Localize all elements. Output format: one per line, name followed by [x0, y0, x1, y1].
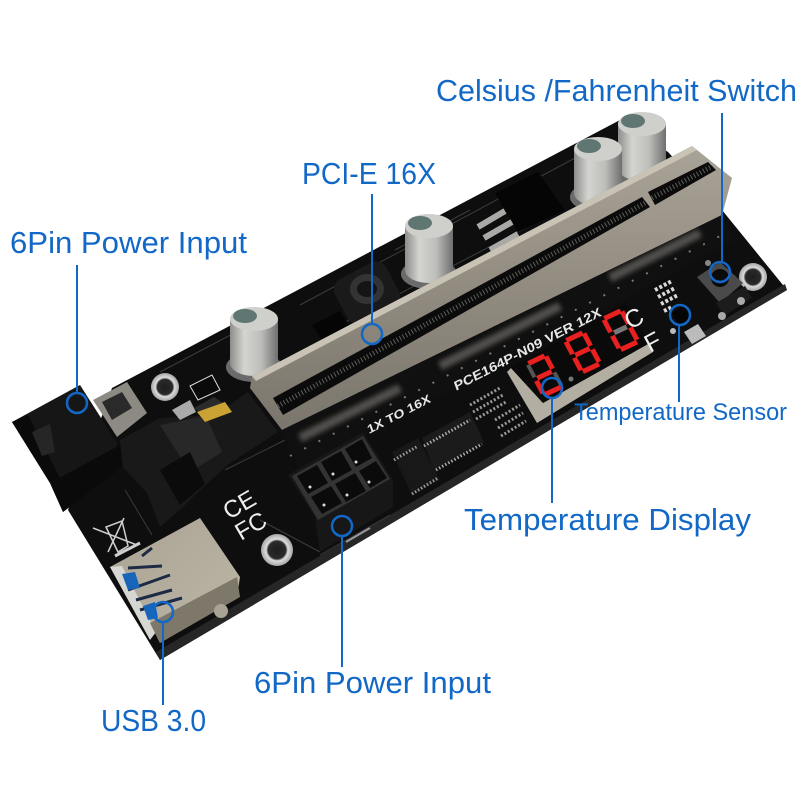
C and F unit marks: F [640, 326, 666, 358]
callout: left 6Pin Power Input: 6Pin Power Input [10, 225, 247, 260]
callout: Temperature Display [464, 378, 751, 537]
inductor coil [330, 257, 404, 329]
callout: bottom 6Pin Power Input: 6Pin Power Input [254, 665, 491, 700]
sensor and resistors [655, 281, 706, 344]
C and F unit marks [620, 302, 666, 358]
digit 0 [603, 310, 638, 350]
celsius fahrenheit push switch [697, 260, 752, 320]
callout: Temperature Display: Temperature Display [464, 502, 751, 537]
circuit board [68, 120, 787, 660]
7-segment temperature display [507, 303, 653, 423]
callout: USB 3.0 [101, 602, 206, 738]
decimal point [568, 376, 574, 382]
callout: bottom 6Pin Power Input [254, 516, 491, 700]
small SMD parts [172, 375, 232, 422]
left 6-pin power connector [12, 385, 278, 527]
6-pin power input connector [288, 432, 393, 552]
callout: PCI-E 16X [302, 156, 436, 344]
USB 3.0 port [110, 518, 240, 643]
capacitors [226, 112, 670, 382]
recycling bin icon [93, 518, 140, 556]
CE and FCC marks: FC [230, 507, 272, 546]
mounting holes [151, 263, 767, 566]
callout: Celsius Fahrenheit Switch [436, 73, 797, 282]
board silkscreen text: 1X TO 16X [365, 391, 432, 437]
callout: Temperature Sensor: Temperature Sensor [574, 399, 787, 426]
digit 8 [565, 332, 600, 372]
callout: PCI-E 16X: PCI-E 16X [302, 156, 436, 191]
CE and FCC marks [218, 485, 272, 546]
metal bracket [93, 382, 147, 437]
C and F unit marks: C [620, 302, 649, 335]
callout: USB 3.0: USB 3.0 [101, 703, 206, 738]
PCI-E 16X slot [250, 146, 736, 470]
callout: Celsius Fahrenheit Switch: Celsius /Fahrenheit Switch [436, 73, 797, 108]
callout: Temperature Sensor [574, 305, 787, 426]
digit 2 [527, 355, 562, 395]
callout: left 6Pin Power Input [10, 225, 247, 413]
CE and FCC marks: CE [218, 485, 261, 525]
board silkscreen text [365, 304, 603, 495]
board silkscreen text: PCE164P-N09 VER 12X [452, 304, 603, 394]
